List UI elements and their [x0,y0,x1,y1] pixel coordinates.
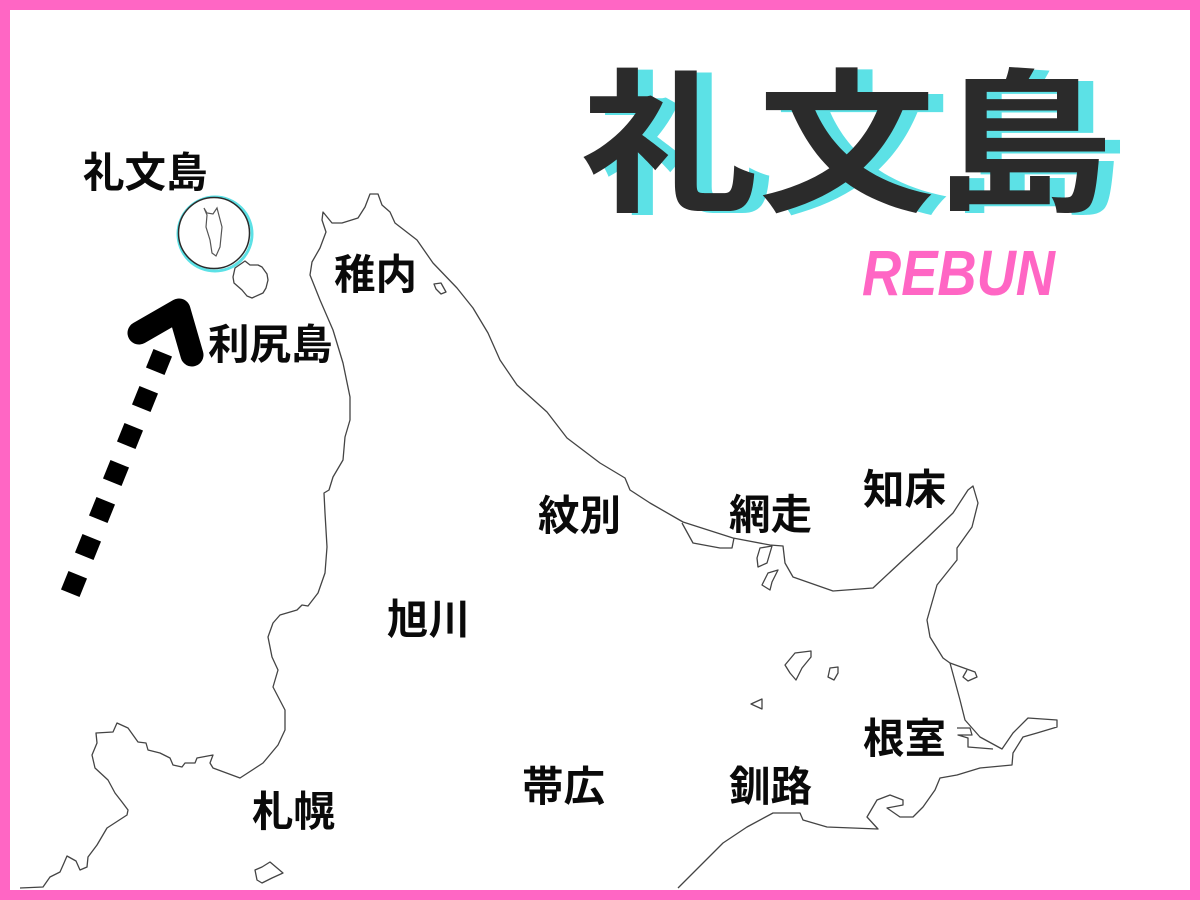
lake: Abashiri [757,546,772,567]
label: Shiretoko: 知床 [863,466,946,513]
title: 礼文島: 礼文島 [581,59,1112,232]
lagoon: Furen [957,728,993,749]
label: Monbetsu: 紋別 [538,492,621,539]
label: Rebun: 礼文島 [83,149,208,196]
label: Abashiri: 網走 [729,491,812,538]
lake: Akan [785,651,811,680]
subtitle: REBUN: REBUN [862,237,1057,309]
lake: small triangle [751,699,762,709]
map: Hokkaido coastline [20,194,1057,888]
lake: Abashiri south [762,570,778,590]
island: Okushiri area [255,862,283,883]
island: Rebun [204,208,222,256]
label: Nemuro: 根室 [863,715,946,762]
lake: Akan east [828,667,838,680]
arrow dashes [61,349,172,597]
label: Sapporo: 札幌 [252,788,335,835]
coastline: main island [20,194,1057,888]
label: Asahikawa: 旭川 [387,596,470,643]
label: Rishiri: 利尻島 [208,321,333,368]
labels: place names [83,149,946,835]
island: Rishiri [233,261,268,298]
label: Obihiro: 帯広 [522,763,605,810]
arrow head [139,310,192,355]
lagoon: Saroma [682,523,734,548]
lake: Wakkanai coast [434,283,446,294]
label: Wakkanai: 稚内 [334,251,417,298]
arrow: dotted route to Rebun [61,310,192,597]
icon: Rebun highlight circle [178,197,252,271]
bay: Notsuke [950,663,977,681]
title: 礼文島: 礼文島 [596,61,1127,234]
label: Kushiro: 釧路 [729,763,812,810]
